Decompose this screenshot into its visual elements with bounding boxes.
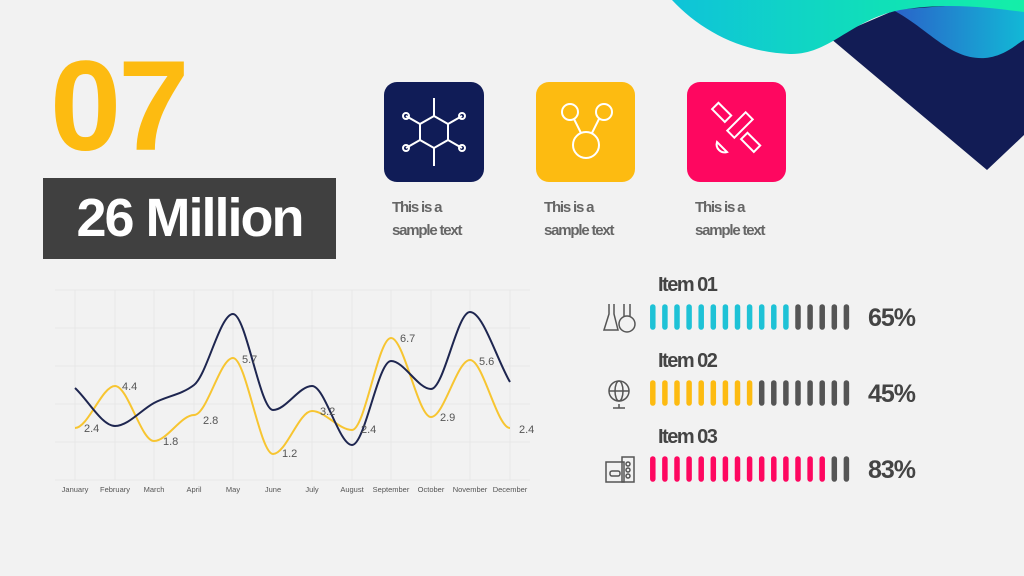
- line chart: 2.4: [361, 424, 376, 436]
- 26 Million banner: [43, 178, 336, 259]
- text block 1: sample text: [392, 222, 461, 239]
- line chart: 6.7: [400, 333, 415, 345]
- text block 2: This is a: [544, 199, 593, 216]
- text block 2: [544, 199, 614, 239]
- line chart: 1.8: [163, 436, 178, 448]
- line chart: October: [418, 485, 445, 494]
- line chart: June: [265, 485, 281, 494]
- text block 2: sample text: [544, 222, 613, 239]
- text block 3: This is a: [695, 199, 744, 216]
- icon: medicine: [605, 456, 635, 483]
- text block 1: This is a: [392, 199, 441, 216]
- line chart: August: [340, 485, 365, 494]
- text block 1: [392, 199, 462, 239]
- line chart: 1.2: [282, 448, 297, 460]
- line chart: 5.7: [242, 354, 257, 366]
- icon: flasks: [603, 304, 636, 333]
- progress: item 02: 45%: [868, 380, 915, 408]
- icon: molecule: [384, 82, 484, 182]
- icon: satellite: [687, 82, 786, 182]
- big number 07: 07: [50, 35, 186, 178]
- progress: item 01: Item 01: [658, 274, 716, 296]
- line chart: 3.2: [320, 406, 335, 418]
- line chart: November: [453, 485, 488, 494]
- line chart: January: [62, 485, 89, 494]
- line chart: 2.9: [440, 412, 455, 424]
- progress: item 02: [608, 350, 916, 409]
- line chart: May: [226, 485, 240, 494]
- text block 3: sample text: [695, 222, 764, 239]
- line chart: December: [493, 485, 528, 494]
- progress: item 02: Item 02: [658, 350, 716, 372]
- progress: item 03: [605, 426, 916, 484]
- line chart: [55, 290, 534, 494]
- text block 3: [695, 199, 766, 239]
- progress: item 01: 65%: [868, 304, 915, 332]
- line chart: April: [186, 485, 202, 494]
- line chart: February: [100, 485, 130, 494]
- progress: item 01: [603, 274, 916, 333]
- progress: item 03: Item 03: [658, 426, 716, 448]
- line chart: September: [373, 485, 410, 494]
- line chart: 5.6: [479, 356, 494, 368]
- line chart: 2.4: [519, 424, 534, 436]
- line chart: 2.8: [203, 415, 218, 427]
- progress: item 03: 83%: [868, 456, 915, 484]
- icon: atoms: [536, 82, 635, 182]
- decorative top-right shapes: [672, 0, 1024, 170]
- line chart: 2.4: [84, 423, 99, 435]
- icon: globe: [608, 380, 630, 409]
- line chart: July: [305, 485, 319, 494]
- 26 Million banner: 26 Million: [76, 188, 303, 248]
- line chart: 4.4: [122, 381, 137, 393]
- line chart: March: [144, 485, 164, 494]
